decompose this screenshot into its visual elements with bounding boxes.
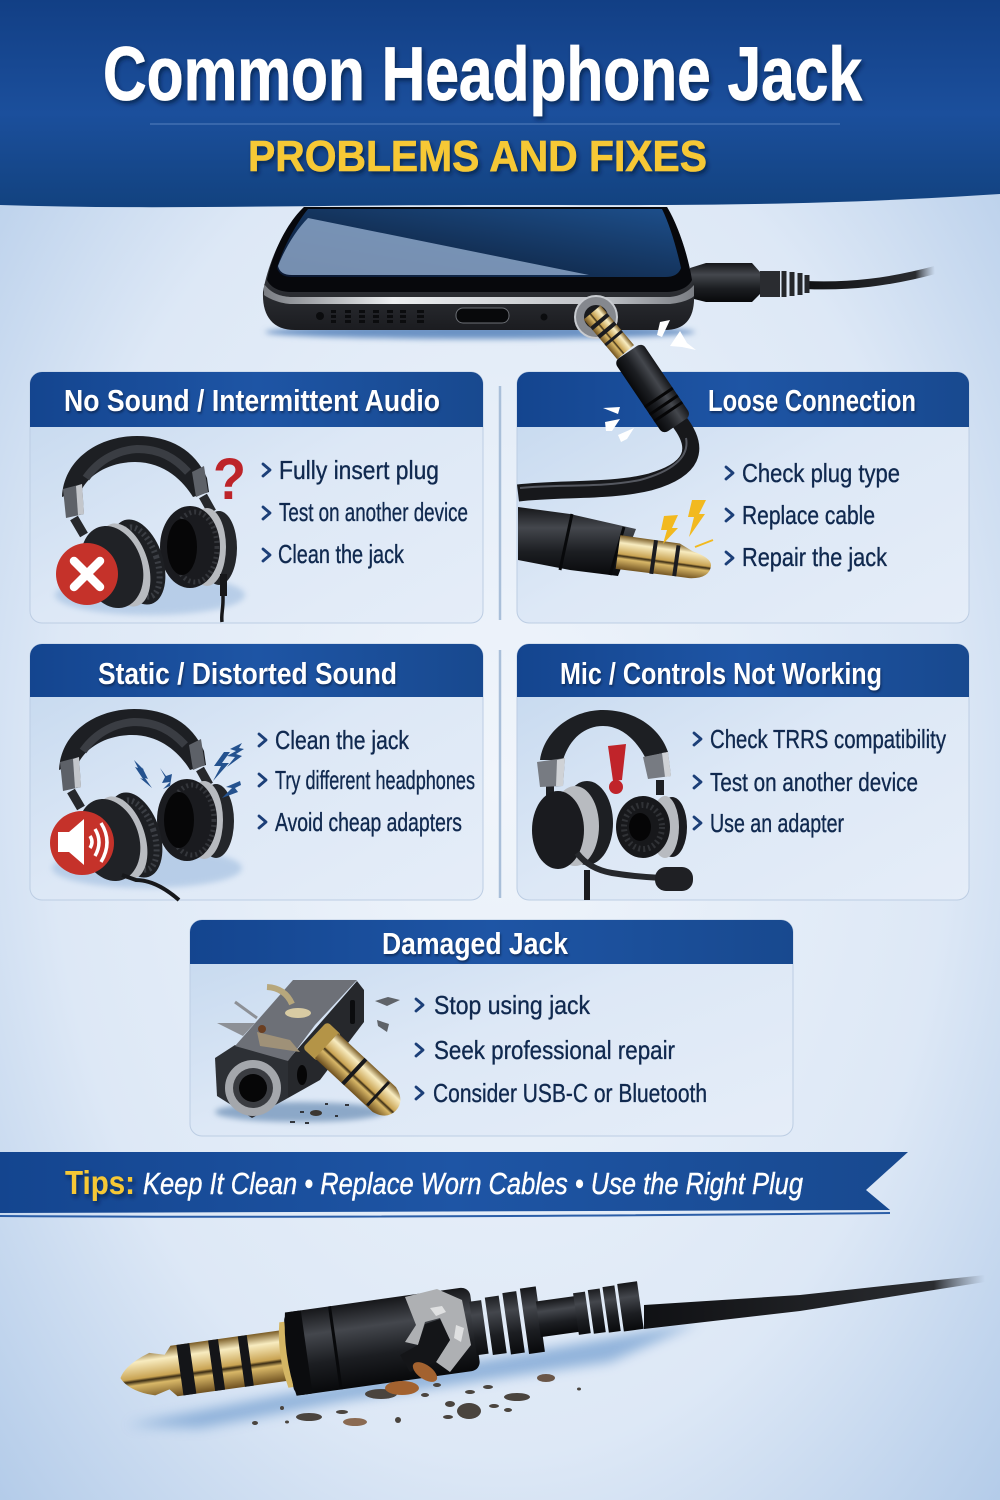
speaker grille — [331, 310, 424, 323]
fix list — [726, 458, 900, 572]
icon: speaker — [50, 811, 179, 900]
heading: No Sound / Intermittent Audio — [64, 383, 440, 418]
fix list: Test on another device — [710, 767, 918, 797]
fix list — [416, 990, 707, 1108]
phone body — [263, 207, 694, 330]
panel: static — [30, 644, 483, 900]
tips label: Tips: — [65, 1164, 135, 1201]
heading: Damaged Jack — [382, 926, 569, 961]
fix list: Test on another device — [279, 497, 468, 527]
fix list: Seek professional repair — [434, 1035, 675, 1065]
cable and loose plug — [518, 296, 713, 582]
subtitle: PROBLEMS AND FIXES — [248, 132, 707, 181]
icon: headphones — [55, 436, 245, 622]
header banner — [0, 0, 1000, 207]
heading: Static / Distorted Sound — [98, 656, 397, 691]
fix list — [263, 455, 468, 569]
panel: no sound — [30, 372, 483, 623]
fix list: Check plug type — [742, 458, 900, 488]
screen highlight — [278, 218, 589, 275]
icon: question mark: ? — [213, 447, 246, 512]
fix list: Avoid cheap adapters — [275, 807, 462, 837]
heading: Loose Connection — [708, 383, 916, 418]
decorative panel divider — [499, 386, 501, 898]
icon: exclamation — [608, 744, 626, 794]
side cable — [690, 263, 935, 302]
panel: damaged jack — [190, 920, 793, 1136]
fix list — [259, 725, 475, 837]
silver band — [264, 284, 694, 304]
port — [456, 308, 509, 323]
fix list: Repair the jack — [742, 542, 888, 572]
phone screen — [277, 209, 681, 277]
fix list: Clean the jack — [278, 539, 405, 569]
fix list: Fully insert plug — [279, 455, 439, 485]
panel: mic — [517, 644, 969, 900]
fix list: Stop using jack — [434, 990, 591, 1020]
icon: broken jack — [215, 980, 408, 1124]
tips ribbon — [0, 1152, 908, 1217]
second plug — [518, 507, 713, 582]
phone bezel — [267, 207, 692, 292]
worn silver patch — [405, 1289, 471, 1372]
tips text: Keep It Clean • Replace Worn Cables • Use the Right Plug — [143, 1166, 803, 1201]
fix list: Use an adapter — [710, 808, 844, 838]
icon: headphones — [52, 709, 242, 889]
icon: red x — [56, 543, 118, 605]
sparks — [661, 500, 713, 547]
panel: loose connection — [517, 372, 969, 623]
fix list: Try different headphones — [275, 765, 475, 795]
fix list: Clean the jack — [275, 725, 410, 755]
fix list — [694, 724, 946, 838]
fix list: Replace cable — [742, 500, 875, 530]
fix list: Consider USB-C or Bluetooth — [433, 1078, 707, 1108]
icon: headset — [532, 710, 693, 900]
icon: static bolts — [134, 743, 244, 798]
phone with plugged cable — [263, 207, 935, 339]
heading: Mic / Controls Not Working — [560, 656, 882, 691]
worn plug illustration — [115, 1263, 985, 1428]
